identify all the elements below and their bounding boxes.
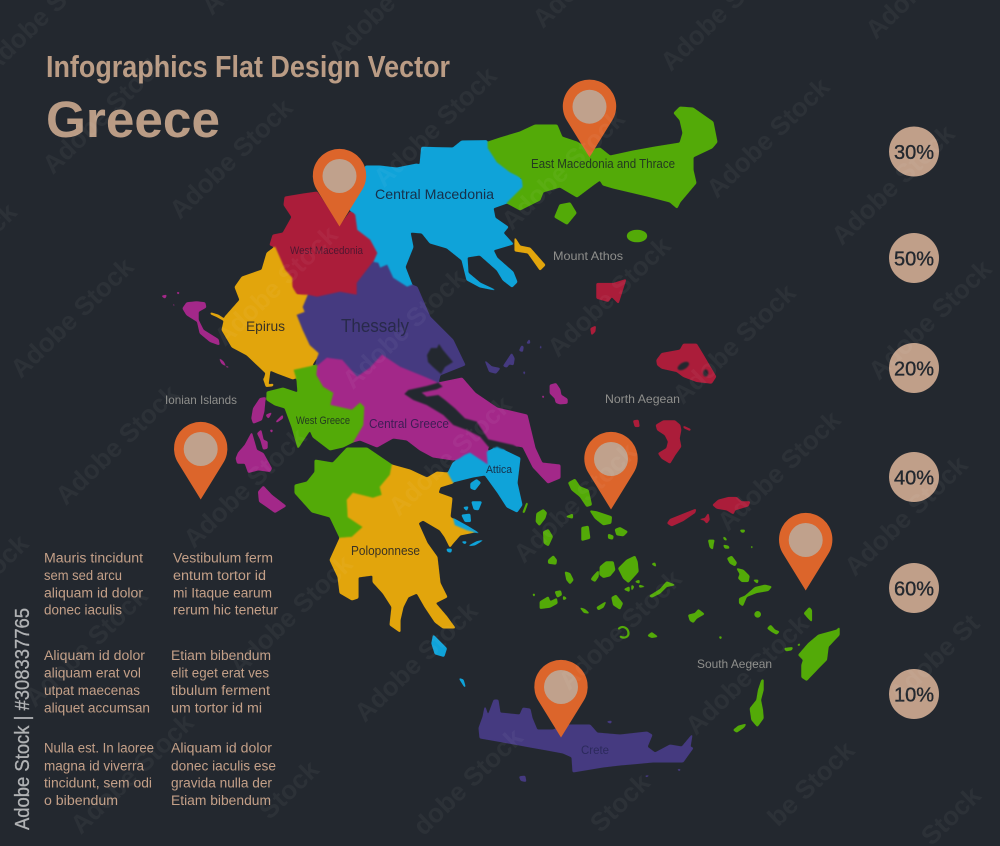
text block: row 2 right: elit eget erat ves [171,666,269,681]
watermark: Adobe Stock [507,436,643,569]
text block: row 2 left [44,648,150,715]
region: East Macedonia and Thrace [488,107,717,210]
watermark: Adobe Stock [36,47,172,180]
text block: row 3 left: magna id viverra [44,758,144,773]
watermark: dobe Stock [407,722,529,841]
watermark: Adobe Stock [838,449,974,582]
text block: row 1 right: rerum hic tenetur [173,603,279,618]
region: Central Greece [315,355,560,483]
text block: row 3 right: Etiam bibendum [171,793,271,808]
region labels: Ionian Islands [165,393,237,407]
percentage badge: 40% [889,452,939,502]
region: West Macedonia [270,192,377,297]
percentage badge: 30%: 30% [894,142,934,164]
map pin: South Aegean [779,513,832,590]
region labels: Attica [486,464,513,476]
text block: row 2 right: tibulum ferment [171,683,270,698]
text block: row 1 right [173,551,279,618]
region: Central Macedonia [350,141,523,290]
watermark: Adobe Stock [208,219,344,352]
region labels: West Greece [296,415,350,427]
region labels: West Macedonia [290,245,364,257]
watermark: Adobe Stock [541,230,677,363]
watermark: Adobe Stock [552,563,688,696]
watermark: Adobe Stock [825,118,961,251]
text block: row 3 left: o bibendum [44,793,118,808]
watermark: Adobe Stock [18,580,154,713]
stock id vertical text: Adobe Stock | #308337765 [12,608,34,830]
watermark: Adobe Stock [495,103,631,236]
region labels: North Aegean [605,392,680,406]
text block: row 1 left: aliquam id dolor [44,585,144,600]
percentage badge: 30% [889,126,939,176]
map pin: Ionian Islands [174,422,227,500]
Euripus channel [404,383,523,452]
title [46,50,450,148]
text block: row 3 left: Nulla est. In laoree [44,741,154,756]
percentage badge: 50% [889,233,939,283]
region labels: Central Greece [369,416,449,431]
percentage badge: 10% [889,669,939,719]
Sporades, Skyros, Chios and Lesbos [485,339,716,546]
Ionian Islands [162,292,286,513]
text block: row 3 left: tincidunt, sem odi [44,776,152,791]
percentage badge: 20% [889,343,939,393]
watermark: Adobe St [882,608,985,709]
watermark: Adobe Stock [382,389,518,522]
watermark: be Stock [761,735,861,832]
watermark: Adobe Stock [367,60,503,193]
map of Greece [162,107,839,782]
text block: row 1 right: Vestibulum ferm [173,551,273,566]
text block: row 1 left: sem sed arcu [44,568,122,583]
percentage badge: 60% [889,563,939,613]
region labels: Epirus [246,318,285,334]
text block: row 2 right [171,648,271,715]
region labels: South Aegean [697,657,772,671]
watermark: Adobe Stock [679,608,815,741]
watermark: Adobe Stock [64,707,200,840]
title: Greece [46,91,220,148]
text block: row 2 left: Aliquam id dolor [44,648,146,663]
text block: row 2 right: um tortor id mi [171,700,262,715]
text block: row 2 left: aliquet accumsan [44,700,150,715]
map pin: East Macedonia [563,80,616,157]
text block: row 1 left: donec iaculis [44,603,122,618]
watermark: Adobe Stock [177,421,313,554]
region: West Greece [267,365,364,450]
percentage badge: 50%: 50% [894,248,934,270]
text block: row 3 right: donec iaculis ese [171,758,276,773]
map pin: North Aegean [584,432,638,510]
percentage badge: 60%: 60% [894,578,934,600]
text block: row 1 left [44,551,144,618]
watermark: Adobe Stock [348,595,484,728]
text block: row 2 left: utpat maecenas [44,683,140,698]
text block: row 3 left [44,741,154,808]
map pin: West Macedonia [313,149,366,226]
region labels: Poloponnese [351,544,420,558]
title: Infographics Flat Design Vector [46,50,450,84]
map pin: Crete [534,660,588,738]
Limnos [591,279,626,335]
East Macedonia islands: Thasos and Samothrace [555,203,646,242]
region: Elis and Achaea [295,448,392,538]
watermark: Adobe Stock [336,262,472,395]
gulf of Volos [427,344,453,374]
text block: row 3 right: gravida nulla der [171,776,272,791]
region: Mount Athos [515,238,545,270]
text block: row 3 right [171,741,276,808]
watermark: Adobe Stock [711,404,847,537]
region labels: Central Macedonia [375,186,494,202]
watermark: Adobe Stock [700,71,836,204]
region: Crete [479,700,693,782]
watermark: Adobe Stock [4,251,140,384]
Saronic and Argolic islands, Kythera [432,479,483,657]
watermark: Adobe Stock [862,253,998,386]
text block: row 2 left: aliquam erat vol [44,666,141,681]
watermark: Adobe Stock [223,548,359,681]
watermark: Stock [584,767,656,838]
text block: row 1 left: Mauris tincidunt [44,551,143,566]
region: Attica [448,447,522,512]
Samos, Ikaria and South Aegean islands [533,497,839,732]
region labels [165,157,772,757]
text block: row 1 right: entum tortor id [173,568,266,583]
percentage badge: 20%: 20% [894,358,934,380]
region labels: East Macedonia and Thrace [531,157,675,171]
text block: row 1 right: mi Itaque earum [173,585,272,600]
region labels: Thessaly [341,316,409,336]
region: Thessaly [297,262,465,383]
text block: row 2 right: Etiam bibendum [171,648,271,663]
region: Epirus [222,247,319,385]
watermark: Stock [253,754,325,825]
watermark: Adobe Stock [49,378,185,511]
region labels: Crete [581,743,609,757]
region: Poloponnese [330,465,475,632]
watermark: Adobe Stock [163,92,299,225]
percentage badge: 10%: 10% [894,684,934,706]
text block: row 3 right: Aliquam id dolor [171,741,273,756]
region labels: Mount Athos [553,249,623,263]
watermark: Adobe Stock [666,277,802,410]
percentage badge: 40%: 40% [894,468,934,490]
